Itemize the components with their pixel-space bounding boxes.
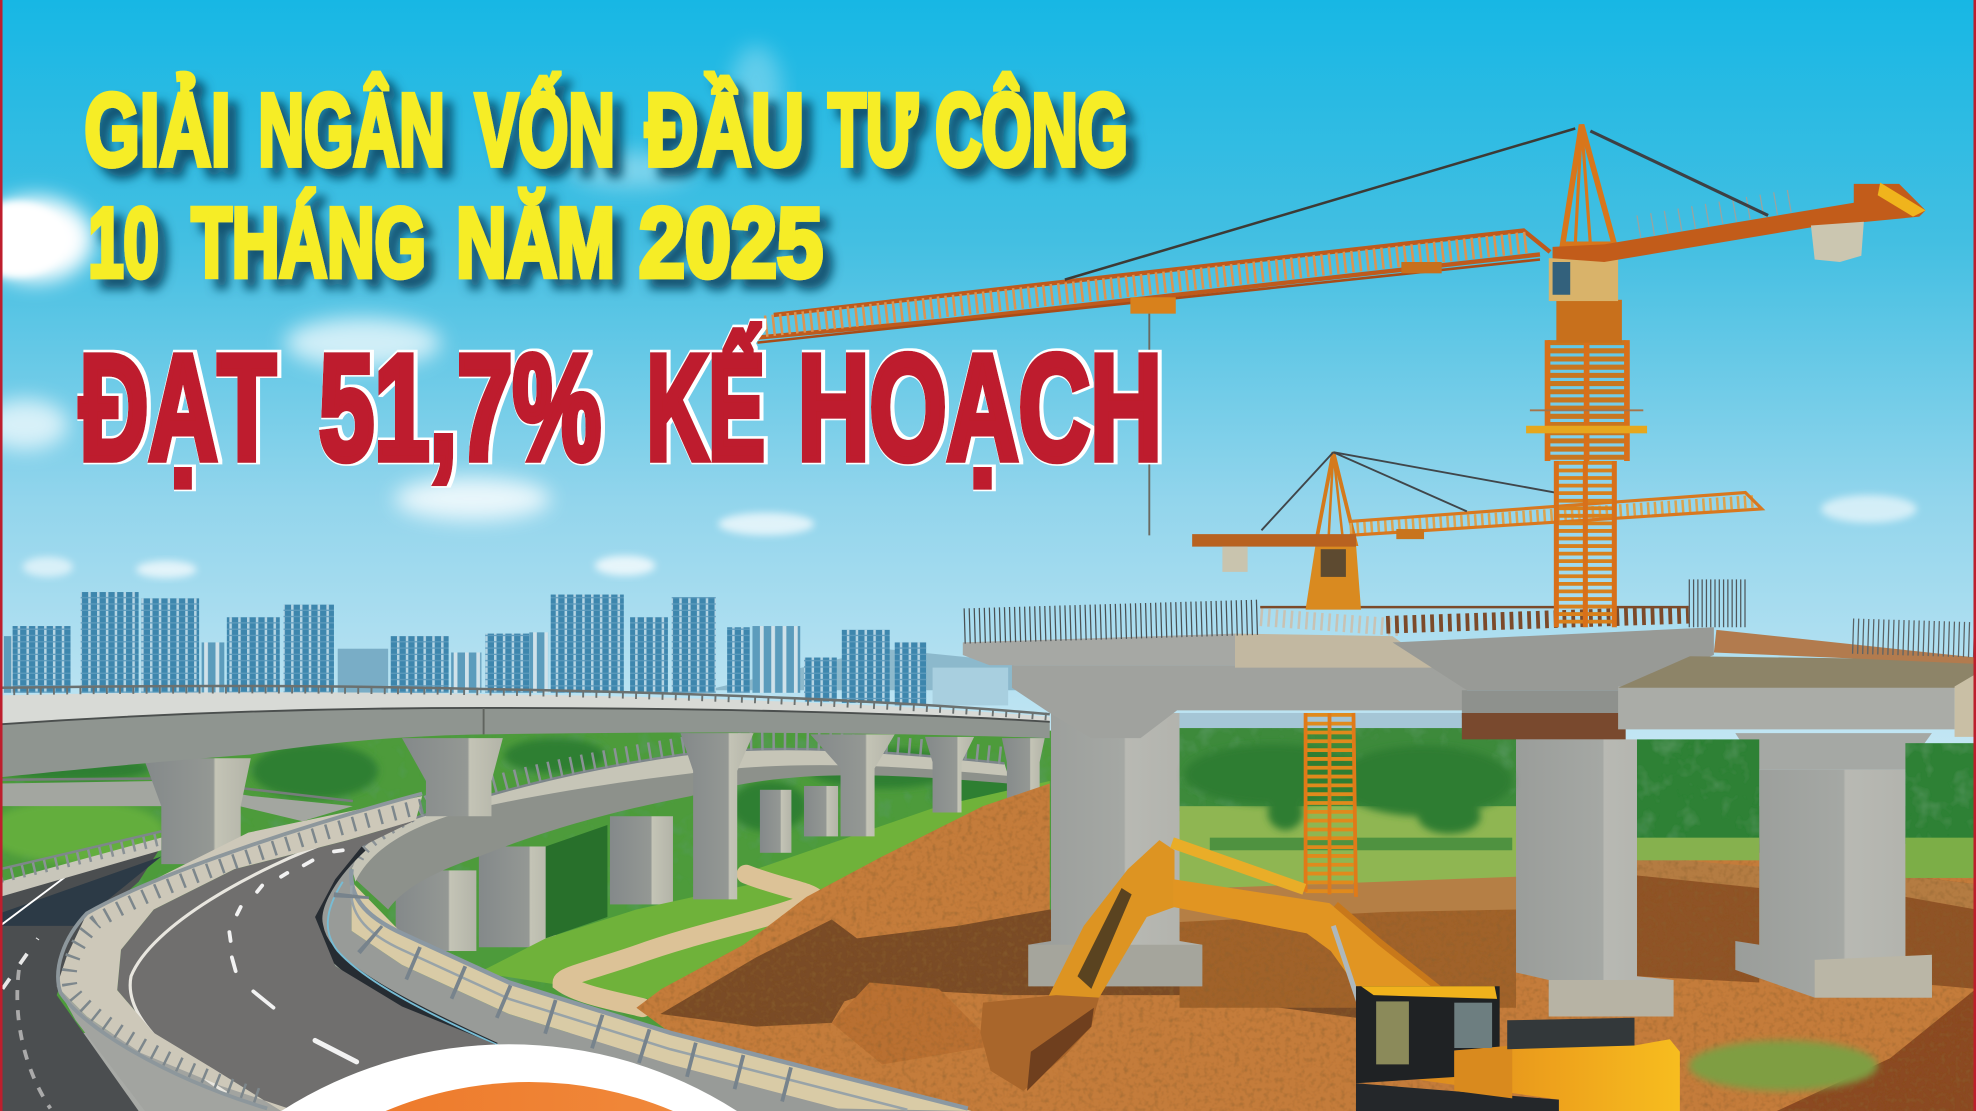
lower left road: [0, 831, 161, 1111]
clouds: [0, 45, 1917, 578]
headline: achieved 51.7% of plan: ĐẠT: [79, 323, 276, 491]
city skyline: [0, 592, 1050, 705]
concrete bridge: piers: [1028, 713, 1932, 1017]
title line 1: [84, 73, 1128, 187]
elevated highway deck: [0, 686, 1050, 777]
grass slopes: [479, 781, 1050, 1008]
construction rebar and railings: [964, 603, 1976, 640]
sky background: [0, 0, 1976, 806]
far trees and meadow between piers: [1180, 713, 1976, 922]
curved ramp deck: [352, 741, 1008, 909]
orange circle top: [386, 1082, 673, 1111]
white circle top: [281, 1044, 737, 1111]
title line 1: TƯ: [828, 73, 918, 187]
excavator: [980, 840, 1680, 1111]
lower section of crane tower under the bridge: [1306, 713, 1356, 897]
title line 2: [88, 188, 823, 297]
title line 2: THÁNG: [192, 188, 426, 297]
road edge line: [130, 838, 340, 1093]
title line 1: VỐN: [475, 73, 615, 187]
grass patch: [1689, 1040, 1878, 1091]
title line 2: NĂM: [456, 188, 615, 297]
right steel guard rail: [351, 869, 972, 1111]
title line 1: ĐẦU: [645, 73, 804, 187]
small tower crane: [1192, 452, 1762, 610]
headline: achieved 51.7% of plan: [79, 323, 1162, 491]
concrete bridge: cap beams and deck: [963, 627, 1976, 739]
headline: achieved 51.7% of plan: HOẠCH: [798, 323, 1162, 491]
green landscape behind the highways: [0, 731, 1059, 1033]
concrete wall below left barrier: [57, 986, 296, 1111]
retaining wall beside main road: [315, 846, 972, 1111]
title line 2: 2025: [639, 188, 823, 297]
headline: achieved 51.7% of plan: 51,7%: [319, 323, 601, 491]
main highway piers: [144, 733, 1045, 899]
ground and soil piles: [636, 783, 1976, 1111]
large tower crane: [757, 125, 1926, 627]
title line 2: 10: [88, 188, 159, 297]
ramp piers: [396, 786, 838, 951]
lane markings: [229, 850, 357, 1062]
main road left barrier and rail: [57, 794, 422, 1111]
title line 1: NGÂN: [258, 73, 445, 187]
main road surface: [117, 820, 542, 1111]
headline: achieved 51.7% of plan: KẾ: [646, 323, 765, 491]
title line 1: GIẢI: [84, 73, 231, 187]
far left overpass: [0, 778, 353, 821]
title line 1: CÔNG: [935, 73, 1128, 187]
dirt track: [562, 874, 817, 1008]
